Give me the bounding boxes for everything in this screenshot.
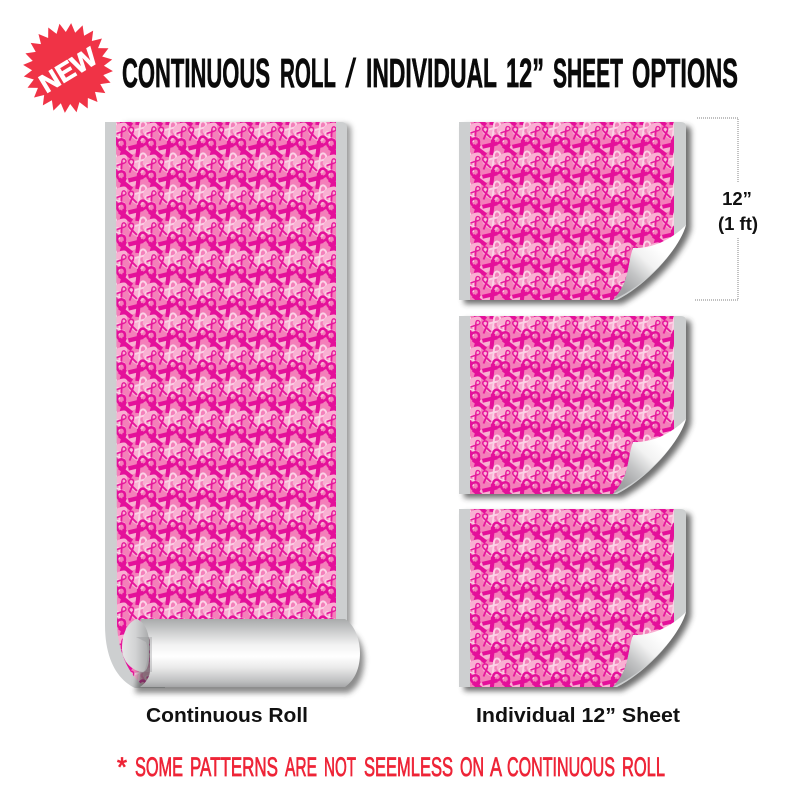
footnote: CONTINUOUS bbox=[507, 752, 615, 782]
label: individual sheet: Individual 12” Sheet bbox=[476, 705, 680, 727]
footnote: ROLL bbox=[622, 752, 665, 782]
panel: sheet 2 bbox=[459, 316, 691, 498]
footnote: NOT bbox=[324, 752, 356, 782]
title: INDIVIDUAL bbox=[366, 50, 497, 96]
footnote: SEEMLESS bbox=[364, 752, 453, 782]
dimension: 12 inch bracket bbox=[695, 118, 758, 300]
roll cylinder bbox=[140, 619, 360, 687]
roll printed pattern bbox=[116, 122, 336, 687]
badge: NEW starburst: NEW bbox=[34, 41, 103, 99]
title: SHEET bbox=[553, 50, 623, 96]
footnote: * bbox=[117, 752, 127, 782]
dimension: 12 inch bracket: (1 ft) bbox=[718, 213, 758, 234]
footnote: PATTERNS bbox=[190, 752, 278, 782]
footnote: A bbox=[490, 752, 502, 782]
footnote: ON bbox=[460, 752, 484, 782]
roll end cap bbox=[122, 619, 149, 672]
panel: continuous roll bbox=[105, 122, 364, 693]
title: CONTINUOUS bbox=[122, 50, 270, 96]
title: ROLL bbox=[280, 50, 336, 96]
roll sheet shadow bbox=[124, 124, 351, 627]
roll backing strip bbox=[105, 122, 347, 688]
title bbox=[122, 50, 738, 96]
footnote bbox=[117, 752, 665, 782]
roll cylinder shadow bbox=[135, 630, 364, 693]
dimension: 12 inch bracket: 12” bbox=[722, 188, 752, 209]
panel: sheet 3 bbox=[459, 509, 691, 691]
label: continuous roll: Continuous Roll bbox=[146, 705, 308, 727]
panel: sheet 1 bbox=[459, 122, 691, 304]
footnote: SOME bbox=[135, 752, 183, 782]
title: 12” bbox=[506, 50, 544, 96]
title: / bbox=[345, 50, 357, 96]
badge: NEW starburst bbox=[20, 20, 116, 116]
roll inner notch bbox=[136, 637, 152, 672]
footnote: ARE bbox=[285, 752, 317, 782]
